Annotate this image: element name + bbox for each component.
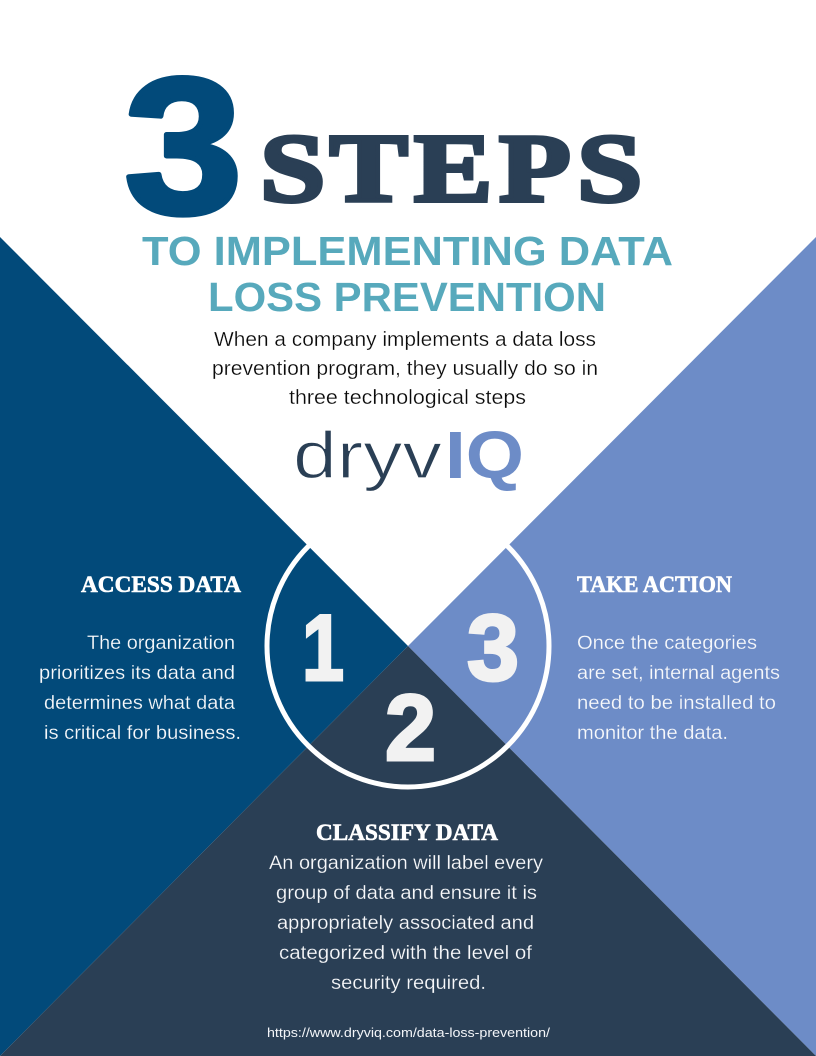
title: STEPS: STEPS bbox=[260, 115, 642, 223]
intro text: three technological steps bbox=[289, 387, 526, 409]
text: access data description: determines what data bbox=[44, 693, 235, 714]
text: classify data description: security required. bbox=[331, 973, 486, 994]
text: take action description bbox=[577, 633, 780, 744]
text: access data description: The organization bbox=[87, 633, 235, 654]
text: take action description: monitor the data. bbox=[577, 723, 728, 744]
heading: take action: TAKE ACTION bbox=[577, 572, 732, 597]
subtitle: LOSS PREVENTION bbox=[208, 274, 606, 320]
text: classify data description: appropriately associated and bbox=[277, 913, 534, 934]
number 2: 2 bbox=[385, 675, 436, 780]
circle ring bbox=[267, 505, 549, 787]
logo: dryvIQ bbox=[293, 418, 524, 493]
heading: access data: ACCESS DATA bbox=[81, 572, 241, 597]
intro text: When a company implements a data loss bbox=[214, 329, 596, 351]
subtitle: TO IMPLEMENTING DATA bbox=[142, 228, 673, 274]
step 1: access data bbox=[39, 572, 241, 744]
title: large number 3: 3 bbox=[124, 38, 243, 255]
text: access data description: prioritizes its data and bbox=[39, 663, 235, 684]
number 3: 3 bbox=[467, 595, 519, 700]
panel: step 2 triangle bbox=[0, 646, 816, 1056]
intro text: prevention program, they usually do so in bbox=[212, 358, 598, 380]
text: take action description: are set, internal agents bbox=[577, 663, 780, 684]
intro text bbox=[212, 329, 598, 409]
subtitle bbox=[142, 228, 673, 320]
text: access data description: is critical for business. bbox=[44, 723, 241, 744]
text: classify data description: An organization will label every bbox=[269, 853, 544, 874]
heading: classify data: CLASSIFY DATA bbox=[316, 820, 498, 845]
step 3: take action bbox=[577, 572, 780, 744]
text: classify data description bbox=[269, 853, 544, 994]
text: classify data description: categorized with the level of bbox=[279, 943, 533, 964]
source url: https://www.dryviq.com/data-loss-prevention/ bbox=[267, 1025, 550, 1040]
number 1: 1 bbox=[302, 595, 344, 700]
text: access data description bbox=[39, 633, 241, 744]
panel: step 3 triangle bbox=[408, 237, 816, 1056]
step 2: classify data bbox=[269, 820, 544, 994]
text: take action description: Once the categories bbox=[577, 633, 757, 654]
logo: dryvIQ: dryv bbox=[293, 418, 442, 492]
logo: dryvIQ: IQ bbox=[445, 418, 524, 493]
panel: step 1 triangle bbox=[0, 237, 408, 1056]
text: classify data description: group of data and ensure it is bbox=[276, 883, 537, 904]
text: take action description: need to be installed to bbox=[577, 693, 776, 714]
